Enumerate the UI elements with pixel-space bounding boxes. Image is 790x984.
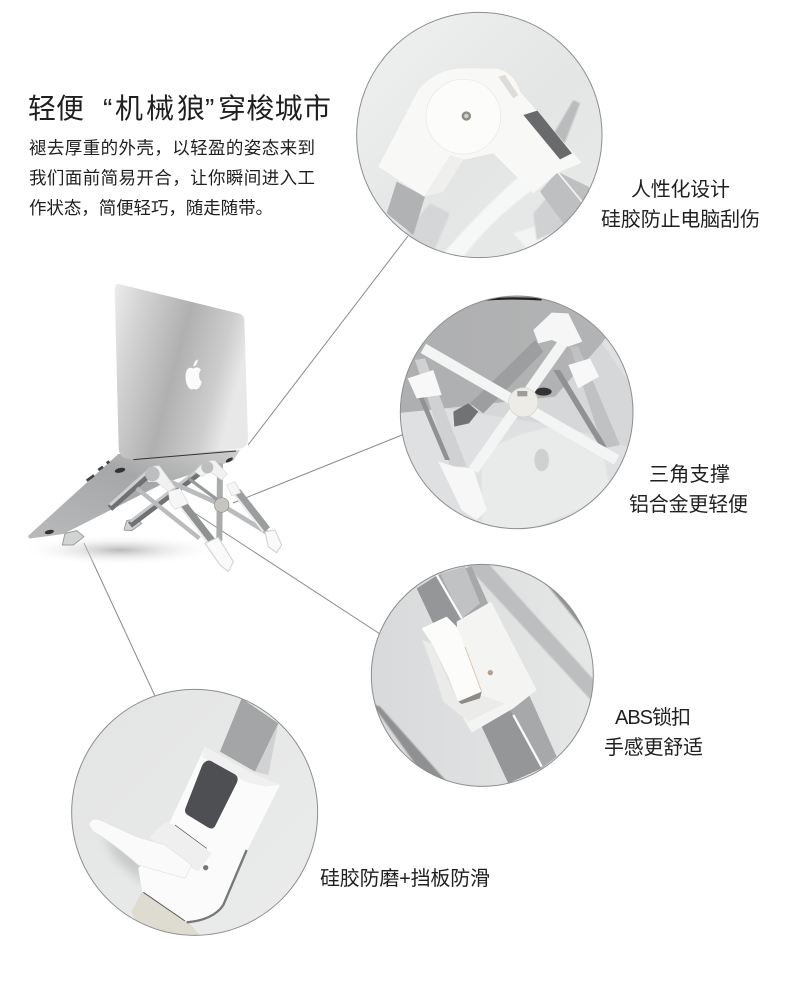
intro text: 作状态，简便轻巧，随走随带。 bbox=[29, 198, 273, 218]
white hinge body bbox=[378, 68, 582, 197]
detail circle: foot with silicone pad bbox=[65, 685, 325, 942]
left leg bbox=[415, 358, 467, 467]
aluminium rail bbox=[417, 575, 542, 783]
intro text: 褪去厚重的外壳，以轻盈的姿态来到 bbox=[29, 138, 315, 158]
rear feet bbox=[62, 531, 84, 545]
centre badge bbox=[509, 388, 538, 417]
intro text: 我们面前简易开合，让你瞬间进入工 bbox=[29, 168, 315, 188]
table reflection bbox=[132, 892, 199, 935]
label: triangle support: 铝合金更轻便 bbox=[629, 493, 748, 516]
feet bbox=[205, 530, 282, 572]
title: ” bbox=[205, 93, 214, 124]
laptop lid bbox=[115, 284, 248, 459]
title: 机械狼 bbox=[115, 93, 205, 124]
label: ABS lock: ABS锁扣 bbox=[615, 706, 691, 729]
pivot roller bbox=[150, 822, 212, 872]
aluminium arms bbox=[387, 182, 425, 235]
intro text bbox=[29, 138, 315, 218]
rear rails bbox=[110, 466, 205, 525]
white foot body bbox=[138, 747, 280, 922]
label: ABS lock: 手感更舒适 bbox=[604, 736, 703, 759]
label: triangle support: 三角支撑 bbox=[649, 463, 730, 486]
soft background shapes bbox=[406, 100, 580, 256]
white cross straps bbox=[423, 340, 617, 470]
white clip front bbox=[422, 616, 462, 702]
folding stand bbox=[110, 461, 282, 572]
detail circle: triangular support bbox=[395, 290, 640, 530]
label: silicone anti-scratch: 人性化设计 bbox=[631, 178, 730, 201]
white clip back bbox=[457, 602, 537, 733]
label: anti-slip foot: 硅胶防磨+挡板防滑 bbox=[320, 867, 490, 890]
label: ABS lock bbox=[604, 706, 703, 759]
title: “ bbox=[103, 93, 112, 124]
centre badge bbox=[214, 498, 229, 512]
foot bbox=[438, 462, 487, 520]
hinges bbox=[145, 461, 241, 509]
rear rail and foot bbox=[470, 340, 543, 413]
laptop ports bbox=[87, 461, 109, 481]
background bands bbox=[372, 560, 600, 787]
title: 轻便 bbox=[28, 93, 84, 124]
laptop underside bbox=[400, 296, 606, 413]
cross struts bbox=[137, 463, 268, 541]
apple logo bbox=[186, 359, 202, 389]
right leg bbox=[570, 347, 620, 448]
label: silicone anti-scratch: 硅胶防止电脑刮伤 bbox=[601, 208, 760, 231]
floor shadow bbox=[20, 535, 220, 565]
label: triangle support bbox=[629, 463, 748, 516]
silicone pad bbox=[523, 111, 572, 159]
title bbox=[28, 93, 331, 124]
laptop reflection bbox=[482, 427, 612, 530]
label: silicone anti-scratch bbox=[601, 178, 760, 231]
detail circle: hinge with silicone pad bbox=[350, 0, 610, 260]
title: 穿梭城市 bbox=[218, 93, 331, 124]
legs bbox=[180, 492, 267, 543]
laptop base bbox=[28, 450, 240, 539]
hinges bbox=[533, 313, 582, 347]
shadow below flap bbox=[104, 839, 140, 882]
aluminium tube bbox=[220, 698, 278, 772]
detail circle: ABS lock bbox=[365, 560, 600, 790]
laptop illustration bbox=[20, 284, 248, 565]
connector lines bbox=[84, 236, 408, 696]
silicone pad bbox=[185, 761, 238, 829]
baffle flap bbox=[89, 819, 192, 878]
